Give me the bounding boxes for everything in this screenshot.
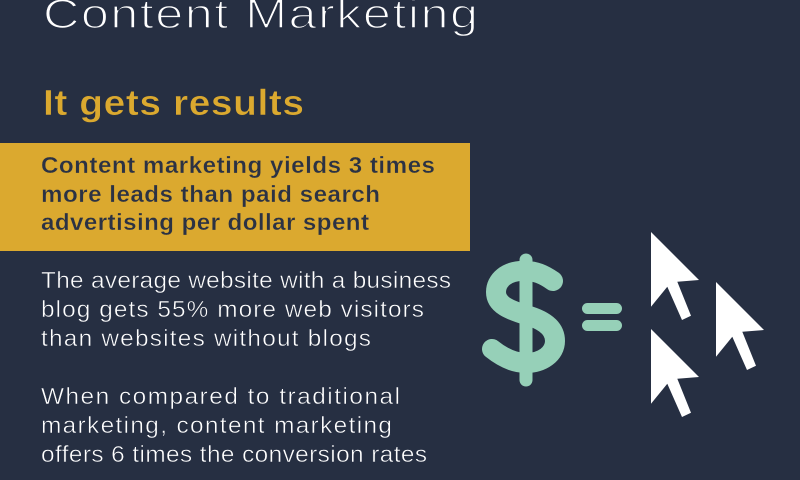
text block: business blog statistic: The average website with a business (41, 269, 451, 294)
icon: cursor right (716, 282, 764, 370)
icon: equals sign (582, 303, 622, 331)
statistic text (41, 153, 435, 235)
text block: conversion rate statistic (41, 385, 427, 468)
text block: business blog statistic (41, 269, 451, 352)
statistic text: advertising per dollar spent (41, 210, 369, 235)
statistic text: more leads than paid search (41, 182, 380, 207)
text block: business blog statistic: than websites without blogs (41, 327, 371, 352)
icon: cursor bottom (651, 329, 699, 417)
panel: highlighted statistic (0, 143, 470, 251)
text block: business blog statistic: blog gets 55% more web visitors (41, 298, 424, 323)
text block: conversion rate statistic: When compared to traditional (41, 385, 400, 410)
statistic text: Content marketing yields 3 times (41, 153, 435, 178)
text block: conversion rate statistic: offers 6 times the conversion rates (41, 443, 427, 468)
text block: conversion rate statistic: marketing, content marketing (41, 414, 392, 439)
icon: dollar sign (492, 260, 555, 380)
icon: cursor top (651, 232, 699, 320)
heading: it gets results: It gets results (43, 82, 304, 123)
